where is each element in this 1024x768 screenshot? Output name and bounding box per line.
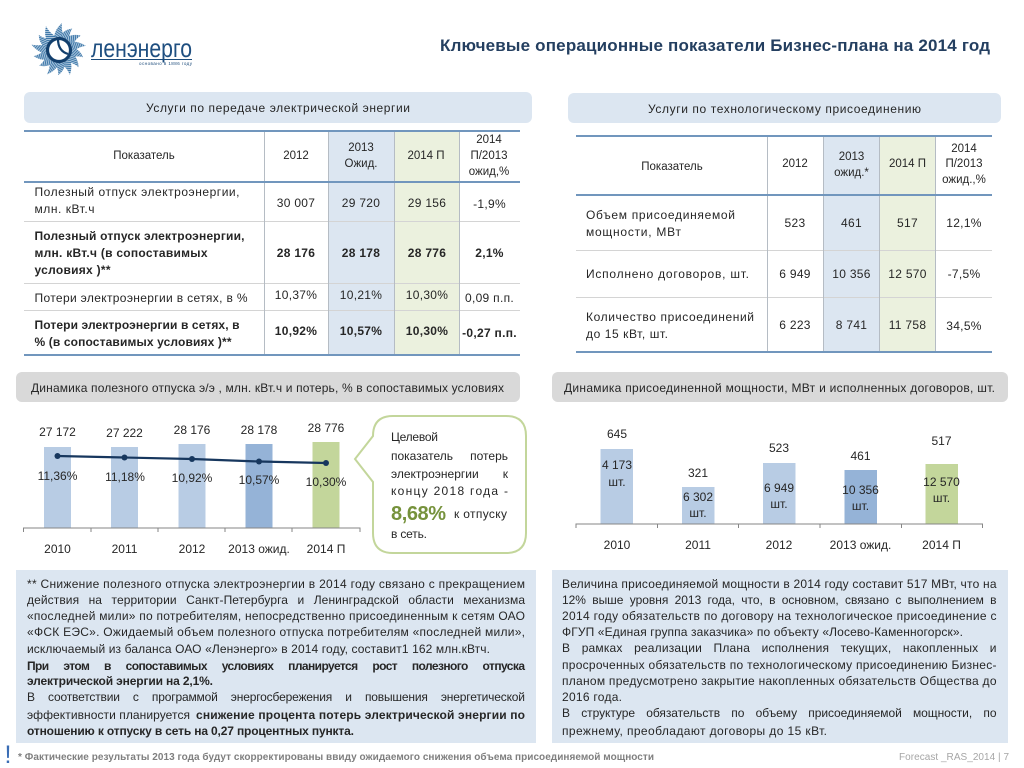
capacity labels: 523 bbox=[769, 441, 789, 455]
row: contracts fulfilled: 12 570 bbox=[888, 267, 927, 281]
bar value labels: 27 172 bbox=[39, 425, 76, 439]
page number: Forecast _RAS_2014 | 7 bbox=[899, 752, 1009, 763]
callout: loss target: показатель bbox=[391, 449, 453, 463]
contract labels: 6 302 bbox=[683, 490, 713, 504]
capacity labels: 461 bbox=[850, 449, 871, 463]
text panel: capacity commentary: В структуре обязательств по объему присоединяемой мощности, по bbox=[562, 706, 997, 720]
text panel: supply commentary: При этом в сопоставимых условиях планируется рост полезного отпуска bbox=[27, 659, 525, 673]
table header: 2014 bbox=[951, 143, 977, 155]
axis labels: 2013 ожид. bbox=[228, 542, 290, 556]
row: connections up to 15 kW: до 15 кВт, шт. bbox=[586, 327, 668, 341]
text panel: supply commentary: «последней мили» по потребителям, непосредственно присоединенным к сетям ОАО bbox=[27, 609, 525, 623]
text panel: capacity commentary: 2014 году обязательств по договору на технологическое присоединение с bbox=[562, 609, 996, 623]
row: connected capacity: 523 bbox=[785, 216, 805, 230]
row: connections up to 15 kW bbox=[586, 310, 982, 341]
text panel: supply commentary: снижение процента потерь электрической энергии по bbox=[196, 708, 525, 722]
heading: transmission services bbox=[24, 92, 532, 123]
row: connections up to 15 kW: 11 758 bbox=[889, 318, 926, 332]
heading: supply chart bbox=[16, 372, 520, 402]
text panel: capacity commentary: 12% выше уровня 2013 года, что, в основном, связано с выполнением в bbox=[562, 593, 996, 607]
row: useful supply comparable: условиях )** bbox=[34, 263, 111, 277]
row: connected capacity bbox=[586, 208, 982, 239]
heading: capacity chart bbox=[552, 372, 1008, 402]
callout: loss target: электроэнергии bbox=[391, 467, 479, 481]
table header: 2013 bbox=[839, 151, 864, 163]
capacity labels: 321 bbox=[688, 466, 708, 480]
table header bbox=[113, 134, 509, 178]
contract labels: шт. bbox=[770, 497, 788, 511]
row: useful supply comparable: 2,1% bbox=[475, 246, 504, 260]
row: useful supply comparable: 28 776 bbox=[408, 246, 446, 260]
callout: loss target: концу 2018 года - bbox=[391, 484, 508, 498]
axis labels bbox=[44, 542, 345, 556]
table header: ожид,% bbox=[469, 166, 509, 178]
row: useful supply: 29 720 bbox=[342, 196, 380, 210]
loss labels: 11,18% bbox=[105, 470, 145, 484]
text panel: supply commentary: электрической энергии на 2,1%. bbox=[27, 674, 213, 688]
table header: 2012 bbox=[782, 158, 808, 170]
table header: П/2013 bbox=[945, 158, 983, 170]
text panel: capacity commentary: просроченных обязательств по технологическому присоединению Бизнес- bbox=[562, 658, 996, 672]
contract labels: шт. bbox=[689, 506, 707, 520]
text panel: capacity commentary: 2016 года. bbox=[562, 690, 622, 704]
contract labels: шт. bbox=[933, 491, 950, 505]
axis labels: 2014 П bbox=[922, 538, 961, 552]
row: useful supply: 29 156 bbox=[408, 196, 446, 210]
row: losses comparable: % (в сопоставимых условиях )** bbox=[34, 335, 232, 349]
row: contracts fulfilled: Исполнено договоров, шт. bbox=[586, 267, 749, 281]
axis labels: 2014 П bbox=[307, 542, 345, 556]
table header bbox=[641, 143, 986, 186]
row: losses comparable: 10,30% bbox=[406, 324, 448, 338]
text panel: supply commentary: исключаемый из баланса ОАО «Ленэнерго» в 2014 году, составит1 162 млн.кВтч. bbox=[27, 642, 490, 656]
row: losses comparable: 10,92% bbox=[275, 324, 317, 338]
text panel: capacity commentary bbox=[552, 570, 1008, 743]
capacity labels bbox=[607, 427, 952, 480]
row: contracts fulfilled: 10 356 bbox=[832, 267, 871, 281]
row: losses comparable: Потери электроэнергии в сетях, в bbox=[34, 318, 240, 332]
axis labels: 2012 bbox=[766, 538, 793, 552]
table header: П/2013 bbox=[470, 150, 508, 162]
table header: ожид.* bbox=[834, 167, 869, 179]
callout: loss target bbox=[355, 416, 526, 553]
axis labels: 2012 bbox=[179, 542, 206, 556]
loss labels: 10,92% bbox=[172, 471, 213, 485]
loss line bbox=[54, 453, 329, 466]
table: transmission services bbox=[24, 131, 520, 355]
bar value labels: 28 176 bbox=[174, 423, 211, 437]
row: useful supply bbox=[34, 185, 506, 216]
text panel: supply commentary: отношению к отпуску в сеть на 0,27 процентных пункта. bbox=[27, 724, 354, 738]
heading: grid connection services bbox=[568, 93, 1001, 123]
row: connections up to 15 kW: Количество присоединений bbox=[586, 310, 754, 324]
callout: loss target: к отпуску bbox=[454, 507, 507, 521]
logo bbox=[31, 23, 193, 77]
table header: ожид.,% bbox=[942, 174, 986, 186]
row: losses: 10,21% bbox=[340, 288, 382, 302]
row: contracts fulfilled bbox=[586, 267, 980, 281]
text panel: supply commentary bbox=[16, 570, 536, 743]
logo wordmark: основано в 1886 году bbox=[139, 61, 193, 66]
callout: loss target: потерь bbox=[470, 449, 508, 463]
axis labels: 2011 bbox=[685, 538, 711, 552]
table header: Ожид. bbox=[345, 158, 377, 170]
row: connected capacity: 517 bbox=[897, 216, 918, 230]
loss labels: 10,57% bbox=[239, 473, 280, 487]
row: useful supply comparable: 28 178 bbox=[342, 246, 380, 260]
contract labels: шт. bbox=[608, 475, 626, 489]
axis labels bbox=[604, 538, 961, 552]
row: useful supply: -1,9% bbox=[473, 197, 506, 211]
row: losses comparable: 10,57% bbox=[340, 324, 382, 338]
text panel: supply commentary: В соответствии с программой энергосбережения и повышения энергетической bbox=[27, 690, 525, 704]
heading: transmission services: Услуги по передаче электрической энергии bbox=[146, 101, 410, 115]
row: useful supply: млн. кВт.ч bbox=[34, 202, 94, 216]
table header: 2012 bbox=[283, 150, 309, 162]
text panel: supply commentary: действия на территории Санкт-Петербурга и Ленинградской области механизма bbox=[27, 593, 525, 607]
heading: grid connection services: Услуги по технологическому присоединению bbox=[648, 102, 921, 116]
row: losses: Потери электроэнергии в сетях, в % bbox=[34, 291, 248, 305]
row: connected capacity: 12,1% bbox=[946, 216, 982, 230]
row: connections up to 15 kW: 6 223 bbox=[779, 318, 811, 332]
row: connected capacity: мощности, МВт bbox=[586, 225, 682, 239]
row: losses comparable bbox=[34, 318, 517, 349]
callout: loss target: в сеть. bbox=[391, 527, 427, 541]
callout: loss target: к bbox=[503, 467, 509, 481]
text panel: supply commentary: «ФСК ЕЭС». Ожидаемый объем полезного отпуска потребителям «последней мили», bbox=[27, 625, 525, 639]
heading: capacity chart: Динамика присоединенной мощности, МВт и исполненных договоров, шт. bbox=[564, 381, 995, 395]
table header: 2013 bbox=[348, 142, 374, 154]
bar value labels bbox=[39, 421, 345, 440]
contract labels: 4 173 bbox=[602, 458, 632, 472]
chart: supply and losses bbox=[24, 421, 360, 556]
text panel: supply commentary: эффективности планируется bbox=[27, 708, 190, 722]
capacity labels: 517 bbox=[931, 434, 952, 448]
contract labels: 10 356 bbox=[842, 483, 879, 497]
table header: 2014 bbox=[476, 134, 502, 146]
table header: 2014 П bbox=[407, 150, 445, 162]
bars bbox=[44, 442, 340, 528]
table header: Показатель bbox=[113, 150, 175, 162]
table: grid connection services bbox=[576, 136, 992, 352]
row: contracts fulfilled: -7,5% bbox=[948, 267, 980, 281]
text panel: capacity commentary: В рамках реализации Плана исполнения текущих, накопленных и bbox=[562, 641, 996, 655]
row: contracts fulfilled: 6 949 bbox=[779, 267, 811, 281]
row: connected capacity: Объем присоединяемой bbox=[586, 208, 735, 222]
contract labels: 12 570 bbox=[923, 475, 960, 489]
loss labels: 11,36% bbox=[38, 469, 78, 483]
axis labels: 2010 bbox=[44, 542, 71, 556]
row: losses: 0,09 п.п. bbox=[465, 291, 514, 305]
bar value labels: 28 776 bbox=[308, 421, 345, 435]
row: useful supply comparable: Полезный отпуск электроэнергии, bbox=[34, 229, 244, 243]
contract labels bbox=[602, 458, 960, 520]
row: connections up to 15 kW: 8 741 bbox=[836, 318, 867, 332]
footnote: * Фактические результаты 2013 года будут скорректированы ввиду ожидаемого снижения объема присоединяемой мощности bbox=[18, 751, 654, 763]
axis labels: 2013 ожид. bbox=[830, 538, 891, 552]
bar value labels: 27 222 bbox=[106, 426, 143, 440]
row: losses: 10,30% bbox=[406, 288, 448, 302]
logo wordmark: ленэнерго bbox=[91, 33, 192, 63]
callout: loss target: 8,68% bbox=[391, 503, 446, 525]
table header: Показатель bbox=[641, 161, 703, 173]
row: useful supply: Полезный отпуск электроэнергии, bbox=[34, 185, 240, 199]
bar value labels: 28 178 bbox=[241, 423, 278, 437]
text panel: capacity commentary: Величина присоединяемой мощности в 2014 году составит 517 МВт, что на bbox=[562, 577, 997, 591]
row: connections up to 15 kW: 34,5% bbox=[946, 319, 982, 333]
title: Ключевые операционные показатели Бизнес-плана на 2014 год bbox=[440, 36, 990, 55]
row: losses comparable: -0,27 п.п. bbox=[462, 326, 517, 340]
callout: loss target: Целевой bbox=[391, 430, 438, 444]
axis labels: 2011 bbox=[112, 542, 138, 556]
contract labels: 6 949 bbox=[764, 481, 794, 495]
bars bbox=[600, 449, 958, 524]
row: losses bbox=[34, 288, 514, 305]
text panel: capacity commentary: ФГУП «Единая группа заказчика» по объекту «Лосево-Каменногорск». bbox=[562, 625, 963, 639]
axis labels: 2010 bbox=[604, 538, 631, 552]
icon: sun logo bbox=[31, 23, 86, 77]
row: connected capacity: 461 bbox=[841, 216, 862, 230]
row: useful supply comparable: 28 176 bbox=[277, 246, 315, 260]
text panel: capacity commentary: планом предусмотрено закрытие накопленных обязательств Общества до bbox=[562, 674, 997, 688]
heading: supply chart: Динамика полезного отпуска э/э , млн. кВт.ч и потерь, % в сопоставимых условиях bbox=[31, 381, 504, 395]
capacity labels: 645 bbox=[607, 427, 627, 441]
row: losses: 10,37% bbox=[275, 288, 317, 302]
text panel: capacity commentary: прежнему, преобладают договоры до 15 кВт. bbox=[562, 724, 827, 738]
row: useful supply comparable bbox=[34, 229, 504, 277]
loss labels: 10,30% bbox=[306, 475, 347, 489]
row: useful supply: 30 007 bbox=[277, 196, 315, 210]
loss labels bbox=[38, 469, 347, 489]
chart: connected capacity and contracts bbox=[576, 427, 982, 552]
text panel: supply commentary: ** Снижение полезного отпуска электроэнергии в 2014 году связано с прекращением bbox=[27, 577, 525, 591]
table header: 2014 П bbox=[889, 158, 926, 170]
contract labels: шт. bbox=[852, 499, 869, 513]
row: useful supply comparable: млн. кВт.ч (в сопоставимых bbox=[34, 246, 208, 260]
